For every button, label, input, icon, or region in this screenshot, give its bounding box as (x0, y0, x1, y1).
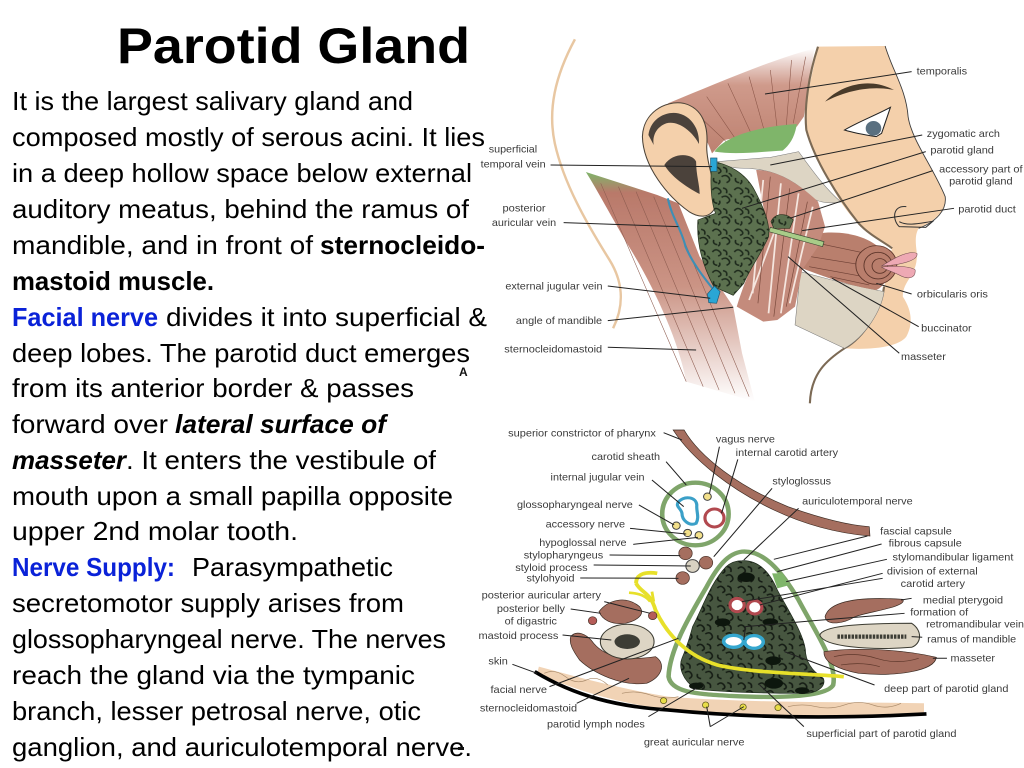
figure A labels: orbicularis oris (917, 290, 988, 301)
figure B: cross section of parotid region (478, 429, 1024, 748)
lips (882, 253, 917, 278)
ramus of mandible (820, 623, 920, 648)
internal jugular vein (677, 498, 698, 524)
figure B labels: deep part of parotid gland (884, 684, 1009, 695)
stray mark near bottom text (458, 747, 464, 750)
sternocleidomastoid section (570, 633, 662, 684)
eyebrow (825, 83, 894, 102)
figure A labels: posterior (503, 204, 546, 214)
figure B labels: ramus of mandible (927, 635, 1016, 646)
text block: facial nerve: divides it into superficial & (166, 302, 487, 332)
figure A labels: auricular vein (492, 218, 556, 229)
figure A labels: superficial (489, 145, 537, 156)
figure B labels: stylopharyngeus (524, 551, 603, 561)
carotid sheath (662, 483, 729, 545)
figure B labels: superior constrictor of pharynx (508, 429, 657, 440)
leader lines (551, 72, 954, 353)
text block: description of the parotid gland: sternocleido- (320, 230, 485, 260)
beige mandible (795, 272, 884, 348)
lymph nodes (660, 698, 781, 711)
temporalis tendon (714, 124, 797, 153)
text block: description of the parotid gland: in a deep hollow space below external (12, 158, 472, 188)
veins (668, 198, 714, 290)
buccinator (802, 232, 888, 290)
figure B labels: facial nerve (490, 685, 547, 696)
skin edge (806, 47, 892, 403)
orbicularis oris (856, 246, 897, 284)
zygomatic arch (717, 152, 841, 203)
figure B labels: mastoid process (478, 631, 558, 642)
figure A: lateral head dissection (481, 39, 1023, 403)
parotid capsule (669, 552, 834, 697)
figure B labels: stylohyoid (527, 574, 575, 584)
text block: facial nerve: Facial nerve (12, 302, 158, 332)
parotid duct (769, 227, 824, 247)
figure A labels: parotid duct (958, 205, 1016, 215)
figure B labels: skin (488, 657, 508, 668)
ear (642, 103, 716, 216)
text block: nerve supply (12, 552, 472, 762)
text block: nerve supply: branch, lesser petrosal nerve, otic (12, 696, 421, 726)
facial nerve (636, 573, 844, 677)
figure B labels: carotid sheath (592, 452, 660, 463)
text block: description of the parotid gland: composed mostly of serous acini. It lies (12, 122, 485, 152)
figure A labels: masseter (901, 352, 946, 363)
figure A labels: accessory part of (939, 165, 1023, 176)
figure B labels: vagus nerve (716, 435, 775, 446)
figure A labels: angle of mandible (516, 316, 602, 327)
sheath nerves (672, 493, 711, 539)
figure A labels: parotid gland (930, 146, 994, 156)
figure A labels: external jugular vein (505, 282, 603, 293)
figure B labels: stylomandibular ligament (893, 553, 1014, 563)
text block: facial nerve: masseter (12, 445, 128, 475)
figure A labels: zygomatic arch (927, 129, 1000, 140)
text block: facial nerve: forward over (12, 409, 168, 439)
eye (844, 107, 890, 137)
parotid gland: deep and superficial parts (681, 561, 824, 694)
figure B labels: fibrous capsule (889, 539, 962, 550)
figure B labels: of digastric (505, 617, 557, 627)
styloid muscles (676, 547, 713, 584)
figure B labels: fascial capsule (880, 527, 952, 537)
figure B labels: formation of (910, 608, 968, 619)
face skin (805, 46, 945, 349)
text block: facial nerve: upper 2nd molar tooth. (12, 516, 298, 546)
parotid gland (698, 162, 769, 295)
accessory parotid gland (771, 215, 793, 228)
superior constrictor of pharynx (673, 430, 870, 536)
text block: description of the parotid gland: mandible, and in front of (12, 230, 314, 260)
figure B labels: carotid artery (901, 579, 966, 590)
figure B labels: posterior auricular artery (482, 591, 602, 601)
figure A labels: buccinator (921, 324, 972, 334)
figure B labels: glossopharyngeal nerve (517, 500, 633, 511)
text block: nerve supply: glossopharyngeal nerve. The nerves (12, 624, 446, 654)
skin layer (537, 667, 924, 716)
figure A labels (481, 67, 1023, 363)
masseter (824, 649, 936, 674)
figure B labels: internal carotid artery (736, 448, 839, 459)
text block: facial nerve (12, 302, 487, 546)
text block: facial nerve: lateral surface of (175, 409, 388, 439)
retromandibular veins (724, 635, 763, 648)
figure label A: A (459, 365, 468, 379)
temporalis muscle (668, 48, 814, 153)
text block: nerve supply: Nerve Supply: (12, 552, 175, 582)
figure B labels (478, 429, 1024, 748)
medial pterygoid (825, 599, 903, 623)
nostril (895, 207, 933, 227)
text block: description of the parotid gland: mastoid muscle. (12, 266, 214, 296)
figure A labels: temporal vein (481, 160, 546, 171)
figure A labels: sternocleidomastoid (504, 345, 602, 355)
figure B labels: accessory nerve (546, 520, 625, 530)
figure B labels: internal jugular vein (551, 473, 645, 484)
digastric (599, 600, 642, 624)
figure B labels: medial pterygoid (923, 596, 1003, 607)
text block: description of the parotid gland (12, 86, 485, 296)
figure B labels: masseter (950, 654, 996, 664)
figure B labels: division of external (887, 567, 978, 578)
text block: description of the parotid gland: It is the largest salivary gland and (12, 86, 413, 116)
stylomandibular ligament (772, 573, 790, 588)
external carotid divisions (730, 598, 762, 614)
figure B labels: posterior belly (497, 604, 566, 615)
figure A labels: parotid gland (949, 177, 1013, 188)
text block: facial nerve: from its anterior border & passes (12, 373, 414, 403)
figure B labels: styloid process (515, 563, 588, 574)
figure B labels: styloglossus (772, 477, 831, 488)
text block: nerve supply: ganglion, and auriculotemporal nerve. (12, 732, 472, 762)
text block: facial nerve: deep lobes. The parotid duct emerges (12, 338, 470, 368)
figure B labels: superficial part of parotid gland (806, 729, 957, 740)
sternocleidomastoid muscle (586, 172, 755, 402)
figure B labels: auriculotemporal nerve (802, 497, 913, 508)
leader lines (512, 433, 947, 727)
text block: facial nerve: mouth upon a small papilla opposite (12, 481, 453, 511)
figure B labels: great auricular nerve (644, 738, 745, 748)
text block: nerve supply: reach the gland via the tympanic (12, 660, 415, 690)
text block: facial nerve: . It enters the vestibule of (126, 445, 437, 475)
figure A labels: temporalis (917, 67, 967, 77)
title: Parotid Gland (117, 18, 470, 74)
neck back contour (552, 39, 621, 328)
text block: nerve supply: Parasympathetic (192, 552, 393, 582)
text block: nerve supply: secretomotor supply arises from (12, 588, 404, 618)
figure B labels: hypoglossal nerve (539, 538, 627, 549)
text block: description of the parotid gland: auditory meatus, behind the ramus of (12, 194, 470, 224)
masseter (737, 170, 825, 322)
mastoid process (600, 624, 654, 659)
figure B labels: retromandibular vein (926, 620, 1024, 631)
figure B labels: parotid lymph nodes (547, 720, 645, 730)
figure B labels: sternocleidomastoid (480, 704, 577, 715)
internal carotid artery (705, 509, 724, 527)
